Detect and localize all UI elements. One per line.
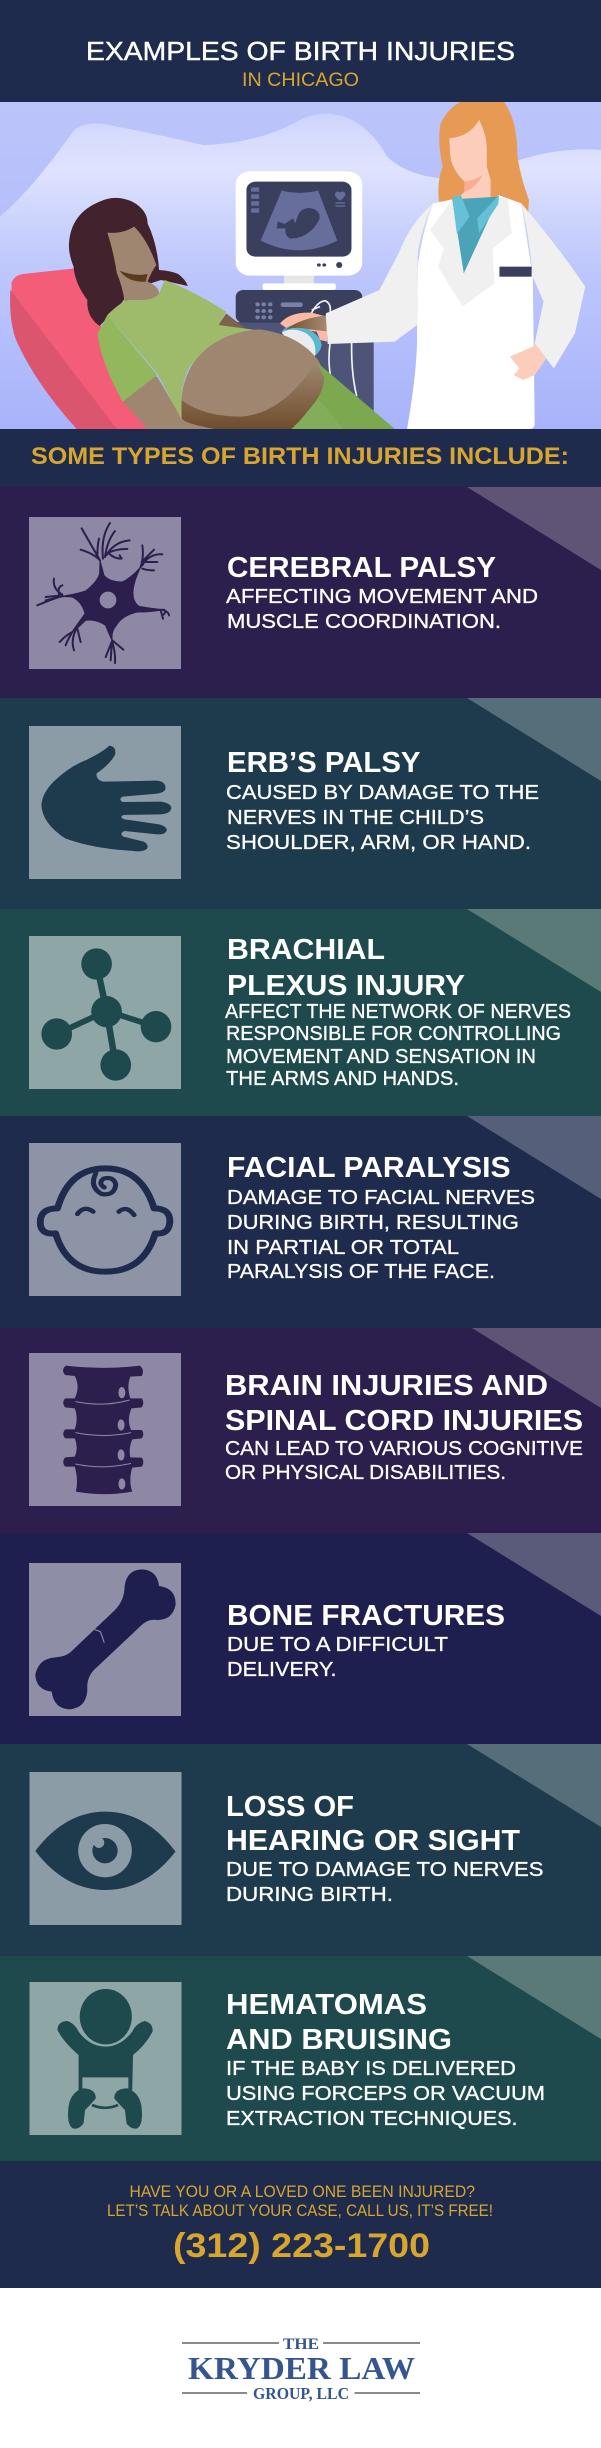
text: brachial plexus injury: BRACHIAL <box>227 934 385 966</box>
patient shirt <box>98 280 261 421</box>
panel: facial paralysis <box>0 1116 601 1328</box>
text: erb's palsy: CAUSED BY DAMAGE TO THE <box>226 782 539 804</box>
panel: bone fractures <box>0 1533 601 1744</box>
doctor hair <box>438 102 529 212</box>
name tag <box>499 267 532 277</box>
doctor hand on hip <box>510 343 546 380</box>
patient belly <box>181 329 324 429</box>
text: facial paralysis: PARALYSIS OF THE FACE. <box>227 1261 495 1283</box>
text: cerebral palsy: CEREBRAL PALSY <box>227 552 496 584</box>
doctor hand, probe and cables <box>280 301 357 396</box>
icon: neuron <box>37 523 169 663</box>
icon: nerve network <box>41 948 171 1081</box>
text: hematomas and bruising <box>226 1989 545 2130</box>
text: hematomas and bruising: USING FORCEPS OR VACUUM <box>226 2083 545 2105</box>
logo: the kryder law group: THE <box>283 2336 319 2353</box>
text: brain and spinal cord injuries <box>225 1370 583 1484</box>
text: loss of hearing or sight: HEARING OR SIGHT <box>226 1825 520 1857</box>
text: bone fractures <box>227 1600 505 1681</box>
text: loss of hearing or sight <box>226 1791 544 1906</box>
text: brachial plexus injury: PLEXUS INJURY <box>227 970 465 1002</box>
text: loss of hearing or sight: LOSS OF <box>226 1791 354 1823</box>
panel: hematomas and bruising <box>0 1956 601 2161</box>
patient arm <box>123 313 245 429</box>
icon: spine <box>63 1366 143 1494</box>
text: bone fractures: BONE FRACTURES <box>227 1600 505 1632</box>
illustration: ultrasound scene <box>0 102 601 429</box>
icon: baby face <box>40 1168 170 1272</box>
icon: baby <box>57 1989 153 2129</box>
text: facial paralysis: DURING BIRTH, RESULTING <box>227 1212 519 1234</box>
text: facial paralysis: IN PARTIAL OR TOTAL <box>227 1237 459 1259</box>
patient hair <box>69 198 188 326</box>
icon: hand <box>41 746 171 851</box>
text: brain and spinal cord injuries: SPINAL CORD INJURIES <box>225 1405 583 1437</box>
icon: fractured bone <box>35 1569 176 1709</box>
text: erb's palsy <box>226 747 539 854</box>
text: brachial plexus injury: MOVEMENT AND SENSATION IN <box>226 1046 536 1068</box>
text: brachial plexus injury: AFFECT THE NETWORK OF NERVES <box>225 1001 571 1023</box>
text: hematomas and bruising: HEMATOMAS <box>226 1989 427 2021</box>
doctor shirt and collar <box>452 195 499 273</box>
text: brain and spinal cord injuries: BRAIN INJURIES AND <box>225 1370 548 1402</box>
doctor coat <box>326 195 585 429</box>
text: facial paralysis: FACIAL PARALYSIS <box>227 1152 510 1184</box>
text: brain and spinal cord injuries: OR PHYSICAL DISABILITIES. <box>225 1462 506 1484</box>
call to action footer <box>0 2161 601 2288</box>
text: hematomas and bruising: AND BRUISING <box>226 2024 452 2056</box>
phone number: (312) 223-1700 <box>173 2227 430 2265</box>
panel: brain and spinal cord injuries <box>0 1328 601 1533</box>
text: cerebral palsy <box>226 552 538 633</box>
ultrasound console <box>236 290 362 323</box>
text: loss of hearing or sight: DUE TO DAMAGE TO NERVES <box>226 1859 544 1881</box>
header band <box>0 0 601 102</box>
text: bone fractures: DELIVERY. <box>227 1659 336 1681</box>
text: brachial plexus injury <box>225 934 571 1090</box>
text: hematomas and bruising: EXTRACTION TECHNIQUES. <box>226 2108 518 2130</box>
call to action text <box>107 2182 493 2220</box>
text: cerebral palsy: AFFECTING MOVEMENT AND <box>226 586 538 608</box>
text: cerebral palsy: MUSCLE COORDINATION. <box>227 611 501 633</box>
subtitle: IN CHICAGO <box>242 69 359 91</box>
logo: the kryder law group <box>182 2336 420 2403</box>
icon: eye <box>35 1812 176 1890</box>
heading band <box>0 429 601 487</box>
panel: erb's palsy <box>0 698 601 910</box>
doctor face <box>449 120 491 200</box>
panel: brachial plexus injury <box>0 909 601 1116</box>
logo: the kryder law group: KRYDER LAW <box>188 2350 415 2386</box>
panel: cerebral palsy <box>0 487 601 698</box>
text: facial paralysis <box>227 1152 535 1283</box>
background hills <box>0 114 601 429</box>
patient skirt <box>291 362 395 429</box>
text: hematomas and bruising: IF THE BABY IS DELIVERED <box>226 2058 516 2080</box>
text: bone fractures: DUE TO A DIFFICULT <box>227 1634 448 1656</box>
logo: the kryder law group: GROUP, LLC <box>253 2384 349 2403</box>
text: erb's palsy: ERB’S PALSY <box>227 747 420 779</box>
patient face <box>107 227 159 302</box>
section heading: SOME TYPES OF BIRTH INJURIES INCLUDE: <box>31 443 569 470</box>
text: loss of hearing or sight: DURING BIRTH. <box>226 1884 393 1906</box>
panel: loss of hearing or sight <box>0 1744 601 1956</box>
text: facial paralysis: DAMAGE TO FACIAL NERVES <box>227 1187 535 1209</box>
fetus <box>277 208 320 238</box>
title: EXAMPLES OF BIRTH INJURIES <box>86 36 515 66</box>
text: erb's palsy: NERVES IN THE CHILD’S <box>227 807 484 829</box>
call to action text: LET’S TALK ABOUT YOUR CASE, CALL US, IT’S FREE! <box>107 2201 493 2220</box>
text: brachial plexus injury: RESPONSIBLE FOR CONTROLLING <box>226 1023 561 1045</box>
call to action text: HAVE YOU OR A LOVED ONE BEEN INJURED? <box>130 2182 475 2201</box>
text: brain and spinal cord injuries: CAN LEAD TO VARIOUS COGNITIVE <box>225 1438 583 1460</box>
text: brachial plexus injury: THE ARMS AND HANDS. <box>226 1068 459 1090</box>
ultrasound cart <box>237 322 374 429</box>
reclining chair <box>10 268 148 429</box>
text: erb's palsy: SHOULDER, ARM, OR HAND. <box>226 832 531 854</box>
ultrasound monitor <box>236 171 362 290</box>
